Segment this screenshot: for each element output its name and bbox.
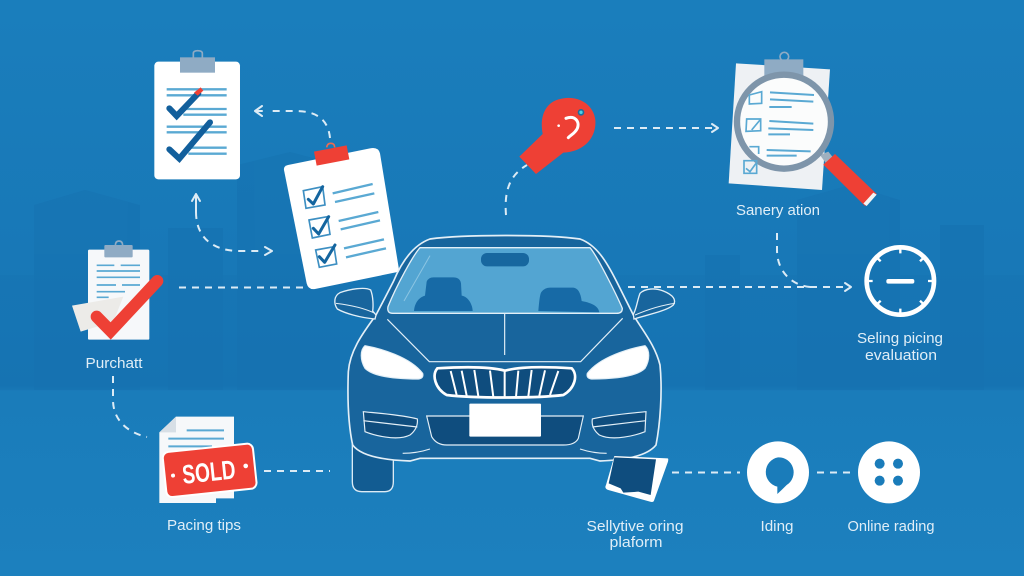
label: selective pricing platform: Sellytive oring (586, 519, 684, 535)
purchase clipboard (72, 241, 157, 340)
list lines (167, 89, 227, 154)
phone (605, 456, 668, 502)
label: sanery ation: Sanery ation (736, 203, 820, 219)
label: selective pricing platform (586, 519, 684, 551)
mirror tab (481, 253, 529, 266)
connector: purchase to pricing tips (113, 376, 147, 437)
connector: tag to magnifier (614, 124, 718, 132)
label: pricing tips: Pacing tips (167, 518, 241, 534)
clipboard one (154, 51, 240, 179)
background skyline (0, 152, 1024, 390)
connector: car to clock (628, 283, 851, 291)
handle (820, 152, 877, 206)
paper (729, 63, 830, 190)
clip (180, 51, 215, 73)
side mirrors (335, 288, 675, 319)
ribbon (72, 297, 123, 332)
label: selling pricing evaluation: evaluation (865, 348, 937, 364)
connector: label to clock (777, 233, 810, 287)
hood lines (387, 313, 623, 362)
clock icon (867, 247, 934, 315)
windshield (388, 248, 622, 313)
connector: phone to chat (672, 472, 740, 474)
lower intake (427, 416, 583, 445)
idea tag (519, 98, 595, 174)
label: online rating: Online rading (848, 519, 934, 535)
connector: clipboard one down to clipboard two (192, 194, 272, 255)
fog lights (363, 412, 646, 438)
red check (97, 281, 157, 331)
label: purchase: Purchatt (86, 356, 142, 372)
car (335, 235, 675, 492)
connector: clipboard one to clipboard two (255, 106, 330, 138)
headlights (361, 346, 649, 379)
label: iding: Iding (760, 519, 794, 535)
connector: chat to online (817, 472, 850, 474)
wheels (352, 445, 393, 492)
sold document (159, 417, 257, 503)
label: selling pricing evaluation (857, 331, 943, 364)
sold tag: SOLD (181, 454, 237, 490)
chat icon (747, 441, 809, 503)
lens (737, 75, 831, 169)
label: selective pricing platform: plaform (610, 535, 662, 551)
text lines (97, 265, 140, 297)
clip (104, 241, 133, 257)
seats (414, 277, 599, 312)
magnifier on checklist (729, 52, 877, 206)
grille (435, 367, 575, 398)
license plate (469, 404, 541, 437)
text lines (168, 430, 224, 446)
connector: purchase to car (179, 286, 305, 288)
list (767, 92, 814, 156)
checkmarks (169, 93, 210, 159)
red clip (314, 143, 349, 166)
checkboxes (303, 187, 337, 267)
list lines (333, 184, 386, 257)
connector: sold to car (264, 470, 330, 472)
label: selling pricing evaluation: Seling picing (857, 331, 943, 347)
body (348, 235, 661, 461)
clipboard two (284, 143, 399, 289)
check marks (308, 187, 335, 262)
clip (764, 52, 803, 77)
connector: tag up to car (506, 165, 527, 215)
online rating icon (858, 441, 920, 503)
